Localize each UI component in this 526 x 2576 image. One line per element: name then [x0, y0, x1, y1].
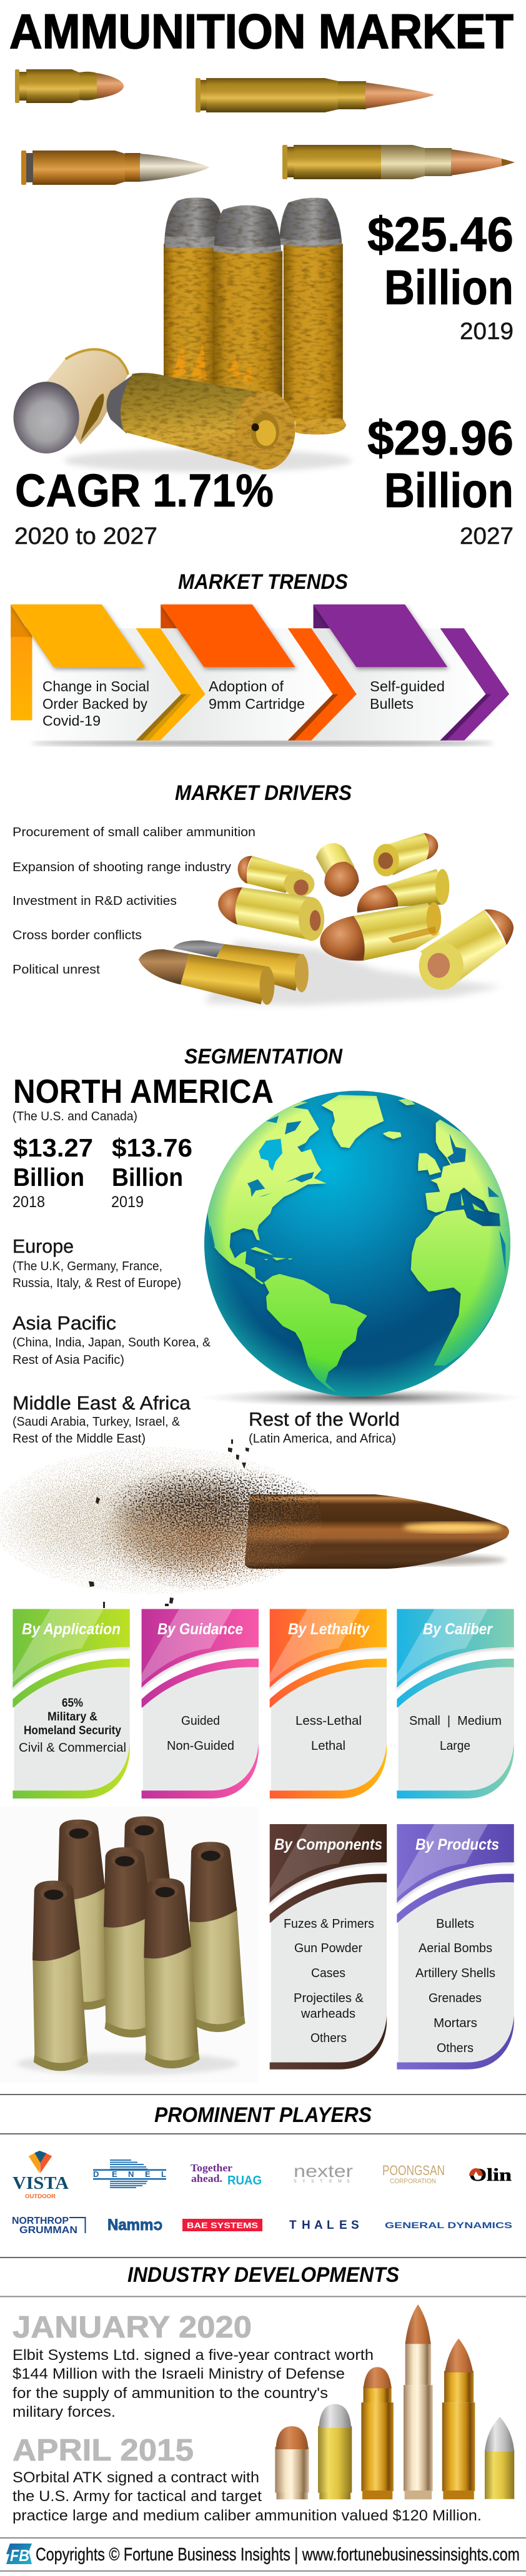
rimfire cartridge front [139, 949, 274, 1005]
card contents: Gun Powder [294, 1942, 362, 1955]
logo: poongsan corporation: CORPORATION [390, 2178, 436, 2185]
card contents [409, 1714, 502, 1753]
stat: 2027 market value: $29.96 [367, 410, 514, 465]
bullet centre left [218, 887, 324, 941]
bullet centre right [357, 869, 449, 913]
trend text 3 [370, 678, 445, 712]
card contents: Large [440, 1739, 470, 1753]
continent: north america [204, 1101, 327, 1285]
stat: 2027 market value: 2027 [460, 523, 514, 550]
region: europe: (The U.K, Germany, France, [12, 1260, 162, 1273]
card contents: Civil & Commercial [19, 1741, 126, 1755]
card contents: 65% [62, 1697, 83, 1710]
card title: By Products [415, 1836, 499, 1853]
card contents: Non-Guided [167, 1739, 234, 1753]
panel: by components [270, 1824, 387, 2070]
market drivers list: Cross border conflicts [12, 929, 142, 942]
development: january 2020: military forces. [12, 2404, 116, 2421]
card contents: Grenades [429, 1991, 482, 2005]
trend text 1: Change in Social [42, 678, 149, 694]
region: europe: Russia, Italy, & Rest of Europe) [12, 1276, 181, 1290]
trend text 1 [42, 678, 149, 729]
card contents [167, 1714, 234, 1753]
value 2019: $13.76 [112, 1133, 192, 1162]
card title: By Guidance [157, 1621, 243, 1638]
bullet upper left [238, 856, 314, 897]
bullet upper right [373, 833, 438, 876]
cartridge 5 [442, 2339, 475, 2499]
card contents: Guided [181, 1714, 220, 1728]
logo: poongsan corporation: POONGSAN [382, 2163, 445, 2178]
value 2019: 2019 [111, 1193, 144, 1211]
trend text 2: Adoption of [209, 678, 284, 694]
panel: by guidance [142, 1609, 259, 1799]
trend text 3: Bullets [370, 696, 414, 712]
development: april 2015: SOrbital ATK signed a contract with [12, 2469, 259, 2486]
card contents: Artillery Shells [415, 1967, 495, 1980]
continent: europe [425, 1120, 522, 1226]
logo: vista outdoor [12, 2151, 69, 2200]
card contents [295, 1714, 362, 1753]
card contents: Bullets [436, 1917, 474, 1931]
region: europe [12, 1235, 181, 1290]
disintegrating bullet illustration [0, 1439, 509, 1608]
heading: market trends: MARKET TRENDS [178, 570, 348, 594]
photo: brown tipped cartridges [0, 1807, 259, 2083]
card contents [415, 1917, 495, 2055]
stat: CAGR [14, 465, 274, 550]
heading: market drivers: MARKET DRIVERS [175, 781, 352, 805]
logo: olin: Olin [469, 2166, 512, 2185]
trend text 2 [209, 678, 305, 712]
globe illustration [200, 1091, 525, 1407]
continent: svalbard [399, 1098, 415, 1105]
development: january 2020: $144 Million with the Israeli Ministry of Defense [12, 2366, 345, 2382]
region: asia pacific: Rest of Asia Pacific) [12, 1353, 124, 1367]
logo: vista outdoor: VISTA [12, 2173, 69, 2193]
cartridge: short pistol round [15, 69, 124, 103]
region: europe: Europe [12, 1235, 74, 1257]
rimfire cartridge back [173, 940, 309, 992]
card contents: warheads [300, 2007, 355, 2021]
card contents: Mortars [434, 2016, 477, 2030]
region: asia pacific: Asia Pacific [12, 1312, 116, 1334]
logo: northrop grumman: GRUMMAN [19, 2225, 77, 2236]
card title: By Components [274, 1836, 382, 1853]
row of four rifle and pistol cartridges [15, 69, 515, 185]
stat: 2027 market value [367, 410, 514, 550]
trend text 1: Covid-19 [42, 713, 101, 729]
development: january 2020: JANUARY 2020 [12, 2311, 252, 2344]
logo: ruag [191, 2162, 262, 2188]
panel: by caliber [397, 1609, 514, 1799]
development: january 2020 [12, 2311, 374, 2421]
card contents: Others [437, 2041, 474, 2055]
value 2018: $13.27 [13, 1133, 93, 1162]
market drivers list: Procurement of small caliber ammunition [12, 826, 256, 839]
logo: nexter systems: nexter [294, 2161, 353, 2181]
caribbean islands [251, 1247, 293, 1260]
development: april 2015: the U.S. Army for tactical and target [12, 2488, 262, 2505]
card contents: Small | Medium [409, 1714, 502, 1728]
cartridge 1 [275, 2426, 309, 2499]
bullet lower right [419, 909, 514, 990]
continent: africa [411, 1210, 522, 1366]
bullet centre big [320, 902, 441, 960]
logo: nammo: Nammo [107, 2216, 162, 2234]
cartridge 4 [404, 2304, 433, 2499]
region: asia pacific [12, 1312, 211, 1367]
development: april 2015: APRIL 2015 [12, 2434, 194, 2467]
card title: By Lethality [288, 1621, 370, 1638]
market drivers list: Political unrest [12, 963, 100, 977]
region: north america: (The U.S. and Canada) [12, 1110, 137, 1123]
icon: fortune business insights logo: FB [10, 2546, 29, 2565]
region: middle east and africa: Middle East & Africa [12, 1392, 191, 1414]
cartridge 3 [361, 2367, 394, 2499]
card contents: Less-Lethal [295, 1714, 362, 1728]
stat: 2019 market value [367, 207, 514, 345]
card contents: Others [310, 2031, 347, 2045]
logo: denel: DENEL [93, 2169, 166, 2179]
card contents: Military & [47, 1710, 97, 1724]
development: april 2015: practice large and medium caliber ammunition valued $120 Million. [12, 2507, 482, 2524]
heading: prominent players: PROMINENT PLAYERS [154, 2103, 372, 2127]
heading: segmentation: SEGMENTATION [184, 1045, 343, 1068]
logo: thales: THALES [289, 2219, 359, 2232]
trend text 2: 9mm Cartridge [209, 696, 305, 712]
photo: scattered brass bullets [139, 833, 514, 1005]
development: april 2015 [12, 2434, 482, 2524]
value 2018: Billion [13, 1163, 84, 1192]
card contents [284, 1917, 374, 2045]
card contents: Fuzes & Primers [284, 1917, 374, 1931]
photo: revolver cartridges [13, 197, 352, 472]
card contents: Homeland Security [24, 1724, 121, 1737]
panel: by products [397, 1824, 514, 2070]
value 2018 [12, 1133, 93, 1211]
company logos [12, 2151, 512, 2236]
card contents: Aerial Bombs [419, 1942, 492, 1955]
logo: denel [93, 2159, 166, 2188]
region: middle east and africa: (Saudi Arabia, Turkey, Israel, & [12, 1415, 181, 1429]
panel: by application [12, 1609, 130, 1799]
row of six upright cartridges [275, 2304, 514, 2499]
cartridge: copper case silver tip [21, 151, 209, 185]
market trends chevron diagram [11, 605, 509, 746]
card contents [19, 1697, 126, 1755]
region: rest of the world [249, 1408, 400, 1446]
region: rest of the world: (Latin America, and Africa) [249, 1432, 396, 1446]
logo: ruag: ahead. [191, 2173, 222, 2184]
trend text 3: Self-guided [370, 678, 445, 694]
cartridge 6 [485, 2417, 514, 2499]
card contents: Lethal [311, 1739, 345, 1753]
logo: northrop grumman: NORTHROP [12, 2216, 69, 2226]
region: rest of the world: Rest of the World [249, 1408, 400, 1430]
continent: south america [264, 1274, 367, 1393]
cartridge: two tone rifle round [282, 145, 515, 179]
logo: general dynamics: GENERAL DYNAMICS [385, 2221, 512, 2230]
development: january 2020: for the supply of ammunition to the country's [12, 2385, 328, 2402]
logo: bae systems [182, 2219, 262, 2231]
bullet upper middle [316, 843, 359, 897]
value 2019: Billion [112, 1163, 183, 1192]
region: north america: NORTH AMERICA [13, 1073, 274, 1110]
panel: by lethality [270, 1609, 387, 1799]
stat: 2019 market value: $25.46 [367, 207, 514, 262]
continent: iceland [383, 1132, 402, 1139]
stat: CAGR: CAGR 1.71% [15, 465, 274, 516]
card contents: Cases [311, 1967, 345, 1980]
logo: ruag: RUAG [227, 2174, 262, 2188]
inland waters [210, 1116, 505, 1272]
development: january 2020: Elbit Systems Ltd. signed a five-year contract worth [12, 2347, 374, 2364]
logo: vista outdoor: OUTDOOR [25, 2193, 56, 2200]
stat: CAGR: 2020 to 2027 [14, 523, 157, 550]
region: middle east and africa: Rest of the Middle East) [12, 1432, 146, 1446]
stat: 2019 market value: 2019 [460, 318, 514, 345]
logo: bae systems: BAE SYSTEMS [187, 2221, 258, 2230]
logo: northrop grumman [12, 2216, 85, 2236]
cartridge 2 [318, 2404, 352, 2499]
value 2019 [111, 1133, 192, 1211]
card contents: Projectiles & [294, 1991, 364, 2005]
continent: greenland [321, 1095, 384, 1148]
trend text 1: Order Backed by [42, 696, 147, 712]
cartridge: long brass rifle round [196, 78, 434, 112]
market drivers list: Investment in R&D activities [12, 894, 177, 908]
heading: industry developments: INDUSTRY DEVELOPMENTS [127, 2263, 399, 2287]
logo: ruag: Together [191, 2162, 232, 2174]
card title: By Application [22, 1621, 121, 1638]
market drivers list [12, 826, 256, 977]
market drivers list: Expansion of shooting range industry [12, 861, 231, 874]
logo: poongsan corporation [382, 2163, 445, 2185]
logo: nexter systems: SYSTEMS [294, 2179, 350, 2184]
value 2018: 2018 [12, 1193, 45, 1211]
region: asia pacific: (China, India, Japan, South Korea, & [12, 1336, 211, 1350]
region: middle east and africa [12, 1392, 191, 1446]
card title: By Caliber [423, 1621, 493, 1638]
continent: british isles [418, 1153, 441, 1175]
footer [6, 2544, 520, 2565]
region: north america [12, 1073, 274, 1211]
